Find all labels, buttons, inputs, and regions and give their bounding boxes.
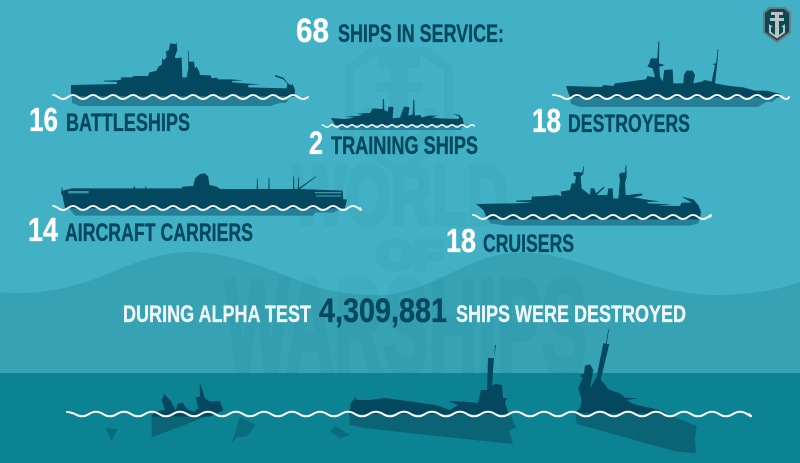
label: destroyers: DESTROYERS (568, 110, 690, 138)
heading (296, 12, 504, 50)
label: aircraft carriers (28, 211, 253, 248)
label: cruisers (446, 222, 574, 259)
sunken ship 3 (575, 329, 697, 453)
label: cruisers: 18 (446, 222, 476, 259)
wave: aircraft carrier (53, 206, 361, 210)
label: destroyers (532, 102, 690, 139)
ship: aircraft carrier (61, 173, 347, 216)
alpha test statement (123, 292, 686, 330)
logo icon (763, 7, 791, 43)
ship: cruiser (473, 165, 711, 226)
label: cruisers: CRUISERS (483, 230, 574, 258)
watermark logo (225, 47, 587, 402)
label: battleships (29, 101, 190, 138)
ship: battleship (53, 42, 308, 106)
debris (106, 417, 350, 445)
sunken ship 2 (349, 345, 516, 444)
heading: 68 (296, 12, 329, 50)
wave: sea surface (67, 412, 751, 416)
label: aircraft carriers: AIRCRAFT CARRIERS (65, 219, 253, 247)
sunken ship 1 (151, 382, 223, 437)
background swell (0, 252, 800, 373)
label: training ships: 2 (309, 125, 323, 161)
watermark logo: OF (377, 234, 443, 278)
heading: SHIPS IN SERVICE: (338, 20, 504, 48)
ship: training ship (331, 99, 464, 130)
watermark logo: WORLD (292, 148, 508, 242)
label: aircraft carriers: 14 (28, 211, 59, 248)
label: battleships: 16 (29, 101, 58, 138)
label: training ships: TRAINING SHIPS (331, 132, 478, 160)
alpha test statement: DURING ALPHA TEST (123, 301, 311, 328)
label: destroyers: 18 (532, 102, 561, 139)
ship: destroyer (553, 42, 789, 107)
alpha test statement: SHIPS WERE DESTROYED (456, 301, 686, 328)
alpha test statement: 4,309,881 (319, 292, 447, 330)
label: training ships (309, 125, 478, 161)
label: battleships: BATTLESHIPS (66, 109, 190, 137)
sea (0, 373, 800, 463)
wave: training ship (322, 125, 474, 127)
